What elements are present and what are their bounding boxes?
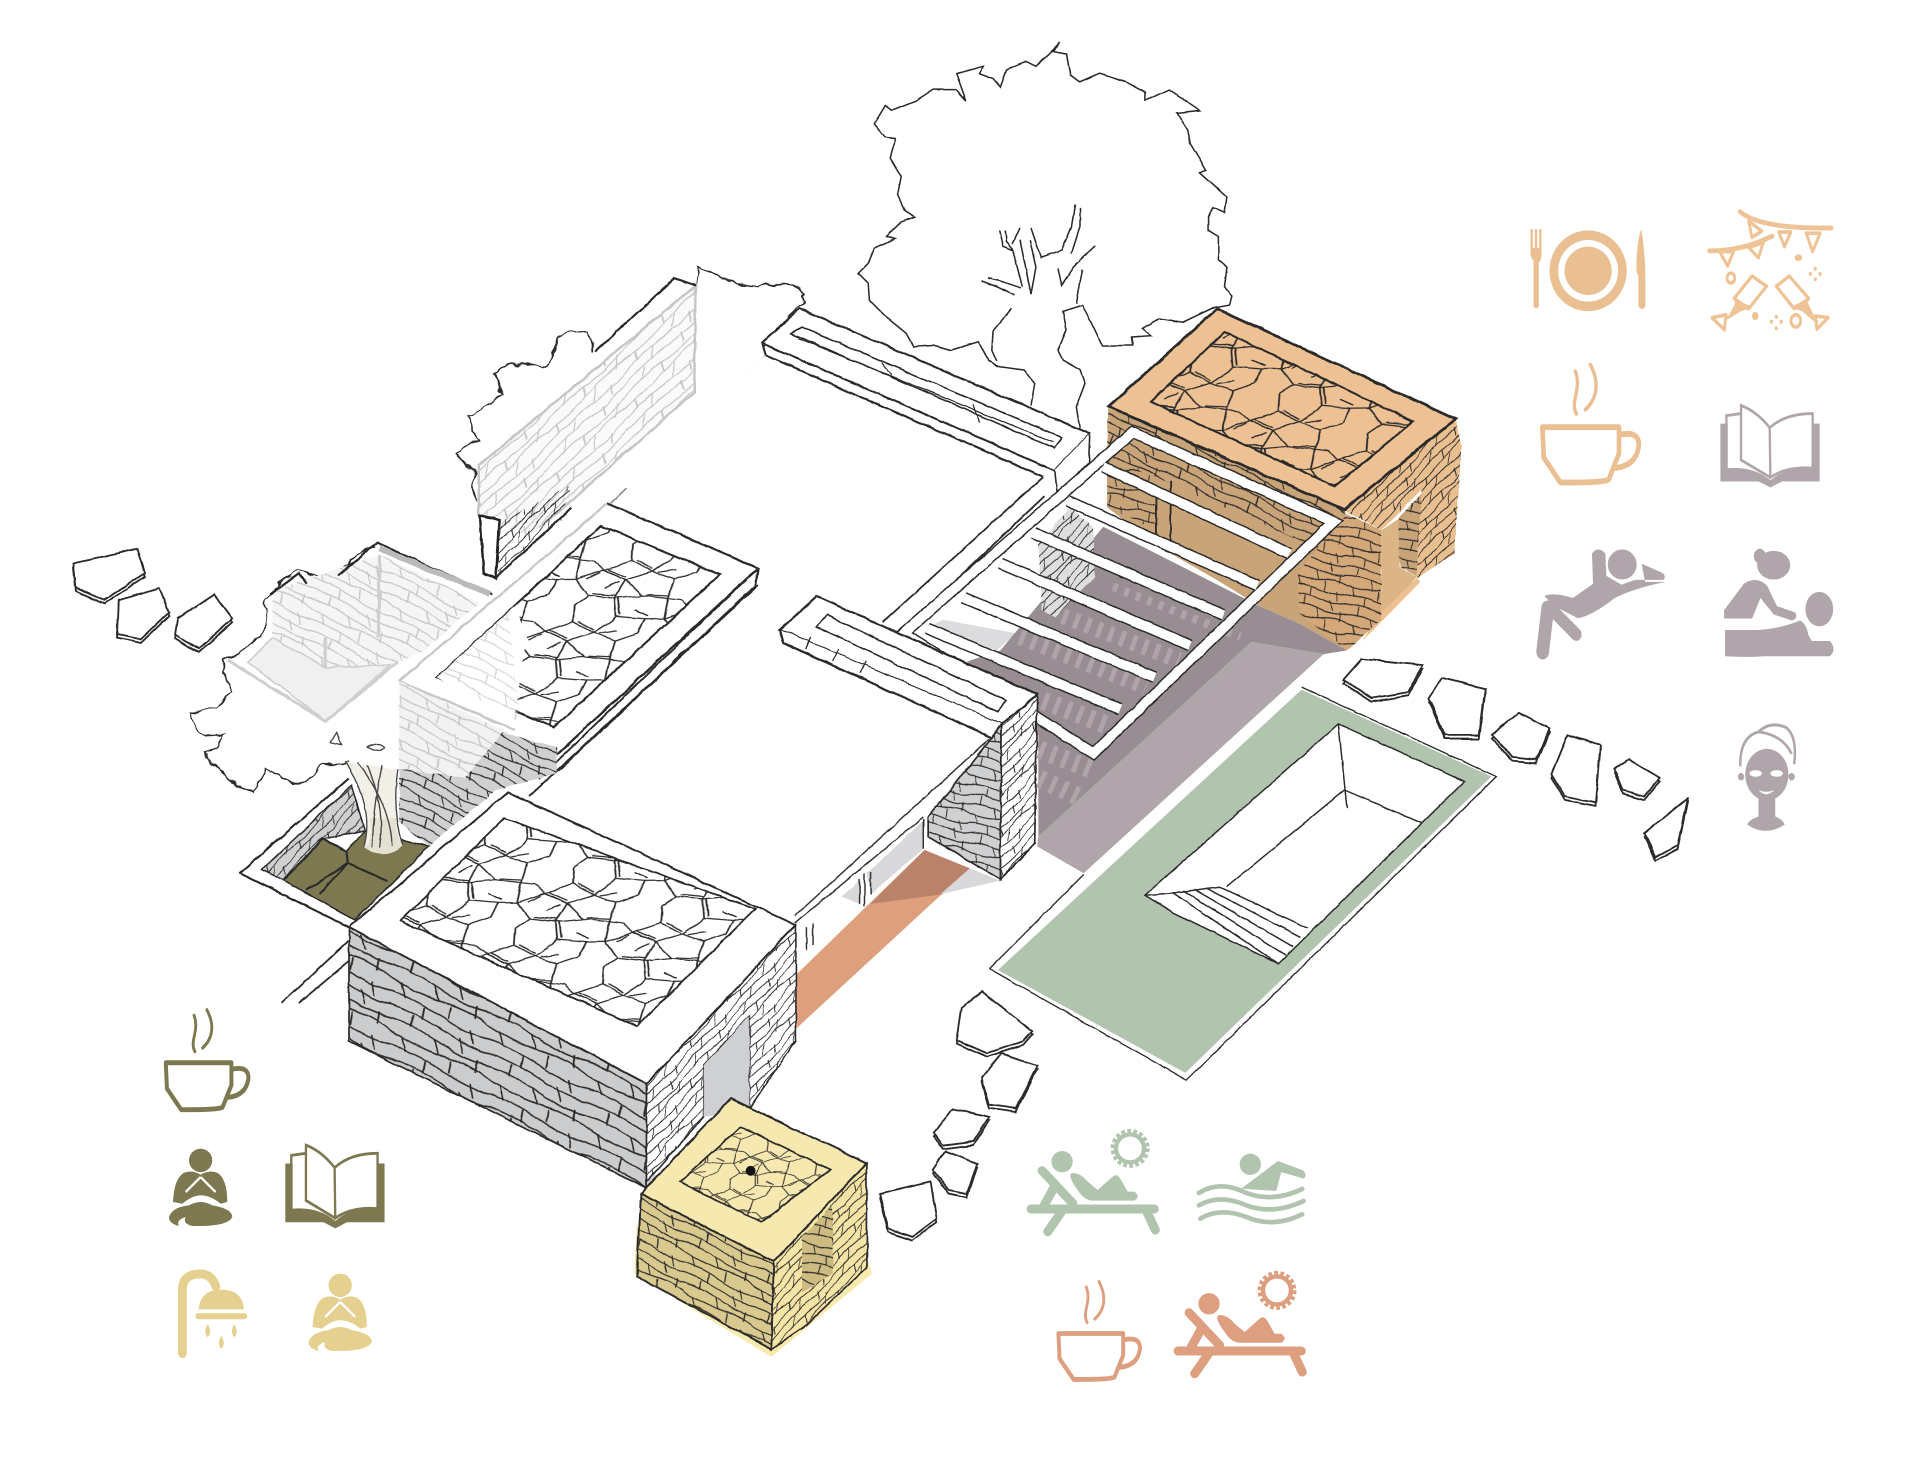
black drain dot <box>746 1166 756 1176</box>
stepping stones right <box>1343 659 1687 861</box>
panel: sunken court with olive floor <box>240 779 429 928</box>
panel: upper wall cap <box>762 309 1090 494</box>
panel: pergola frame <box>904 432 1333 753</box>
panel: lower left tree canopy <box>187 545 377 791</box>
panel: yellow well block <box>634 1099 872 1357</box>
olive floor <box>283 830 429 920</box>
icon: tree trunk <box>331 732 403 854</box>
icon: book grey <box>1720 406 1820 488</box>
panel: front stone block <box>349 792 796 1190</box>
icon: meditation olive <box>169 1149 232 1226</box>
icon: coffee olive <box>166 1010 248 1110</box>
panel: mid planter with flagstones <box>399 503 758 772</box>
panel: green pool deck <box>989 687 1496 1080</box>
panel: back garden wall (ghosted) <box>479 278 765 578</box>
icon: sun lounger salmon <box>1178 1273 1302 1374</box>
icon: coffee salmon <box>1058 1282 1140 1379</box>
icon: coffee orange <box>1542 365 1639 483</box>
panel: orange pavilion <box>1107 309 1461 650</box>
tree behind back wall <box>457 267 804 503</box>
pool <box>1145 724 1464 964</box>
panel: planter side wall stones <box>399 681 557 846</box>
icon: meditation yellow <box>309 1274 372 1351</box>
salmon floor <box>795 850 1000 1029</box>
icon: dining <box>1530 229 1645 311</box>
icon: book olive <box>285 1145 385 1228</box>
icon: face mask <box>1738 725 1795 831</box>
panel: purple terrace under pergola <box>928 527 1347 873</box>
panel: glazing under the lower roof <box>795 739 989 970</box>
panel: ghost pillar behind pergola <box>1038 507 1095 617</box>
icon: massage <box>1724 549 1834 657</box>
icon: party <box>1709 212 1831 330</box>
icon: shower <box>182 1274 247 1354</box>
panel: lower wall block and cap <box>780 597 1037 879</box>
icon: sun lounger green <box>1031 1131 1155 1232</box>
stepping stones bottom <box>879 992 1037 1241</box>
icon: swimming <box>1199 1154 1306 1222</box>
stepping stones left <box>73 549 233 653</box>
icon: lounging person <box>1543 548 1666 652</box>
panel: ghosted sunken terrace <box>228 543 492 721</box>
panel: central roof slabs and long edges <box>282 355 1044 1003</box>
large tree behind the house <box>858 42 1232 430</box>
